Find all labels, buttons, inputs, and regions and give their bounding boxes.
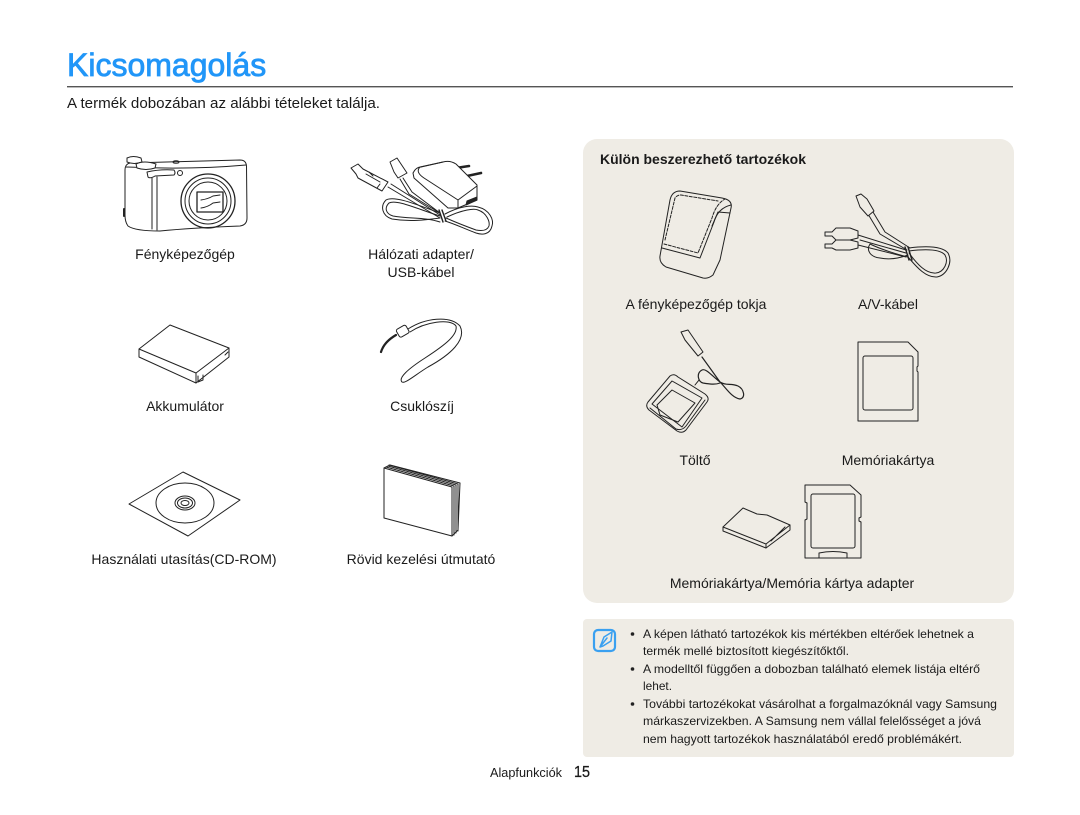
icon: booklet xyxy=(384,465,460,536)
note text: nem hagyott tartozékok használatából eredő problémákért. xyxy=(643,732,962,746)
label: A/V-kábel xyxy=(858,296,918,312)
label: Memóriakártya xyxy=(842,452,934,468)
footer page number: 15 xyxy=(574,764,590,781)
footer page number: Alapfunkciók xyxy=(490,765,562,780)
item: CD-ROM manual xyxy=(91,472,277,567)
label: A fényképezőgép tokja xyxy=(626,296,767,312)
note text: termék mellé biztosított kiegészítőktől. xyxy=(643,644,849,658)
icon: camera xyxy=(124,156,247,231)
label: Memóriakártya/Memória kártya adapter xyxy=(670,575,914,591)
footer page number xyxy=(490,764,590,781)
icon: memory card xyxy=(858,342,918,421)
item: battery xyxy=(139,325,229,414)
panel heading: Külön beszerezhető tartozékok xyxy=(600,151,806,167)
item: quick guide xyxy=(347,465,496,567)
icon: adapter with cable xyxy=(351,158,492,234)
panel: optional accessories xyxy=(583,139,1014,603)
label: Csuklószíj xyxy=(390,398,454,414)
icon: A/V cable xyxy=(825,194,950,277)
item: adapter and USB cable: USB-kábel xyxy=(388,264,454,280)
intro text: A termék dobozában az alábbi tételeket találja. xyxy=(67,95,380,112)
panel: note xyxy=(583,619,1014,757)
icon: battery xyxy=(139,325,229,383)
note text xyxy=(631,627,997,746)
label: Hálózati adapter/ xyxy=(368,246,474,262)
label: Akkumulátor xyxy=(146,398,224,414)
title: Kicsomagolás xyxy=(67,47,266,83)
note text: A képen látható tartozékok kis mértékben eltérőek lehetnek a xyxy=(643,627,974,641)
note text: A modelltől függően a dobozban található elemek listája eltérő xyxy=(643,662,980,676)
icon: note pencil xyxy=(594,630,615,651)
item: camera xyxy=(124,156,247,262)
note text: További tartozékokat vásárolhat a forgalmazóknál vagy Samsung xyxy=(643,697,997,711)
note text: lehet. xyxy=(643,679,672,693)
icon: camera case xyxy=(660,191,731,278)
icon: micro card and adapter xyxy=(723,485,861,558)
note text: márkaszervizekben. A Samsung nem vállal felelősséget a jóvá xyxy=(643,714,981,728)
label: Használati utasítás(CD-ROM) xyxy=(91,551,277,567)
icon: battery charger xyxy=(647,330,744,432)
icon: CD-ROM xyxy=(129,472,240,536)
label: Rövid kezelési útmutató xyxy=(347,551,496,567)
item: adapter and USB cable xyxy=(351,158,492,280)
icon: wrist strap xyxy=(381,319,462,382)
label: Töltő xyxy=(679,452,711,468)
label: Fényképezőgép xyxy=(135,246,235,262)
item: wrist strap xyxy=(381,319,462,414)
